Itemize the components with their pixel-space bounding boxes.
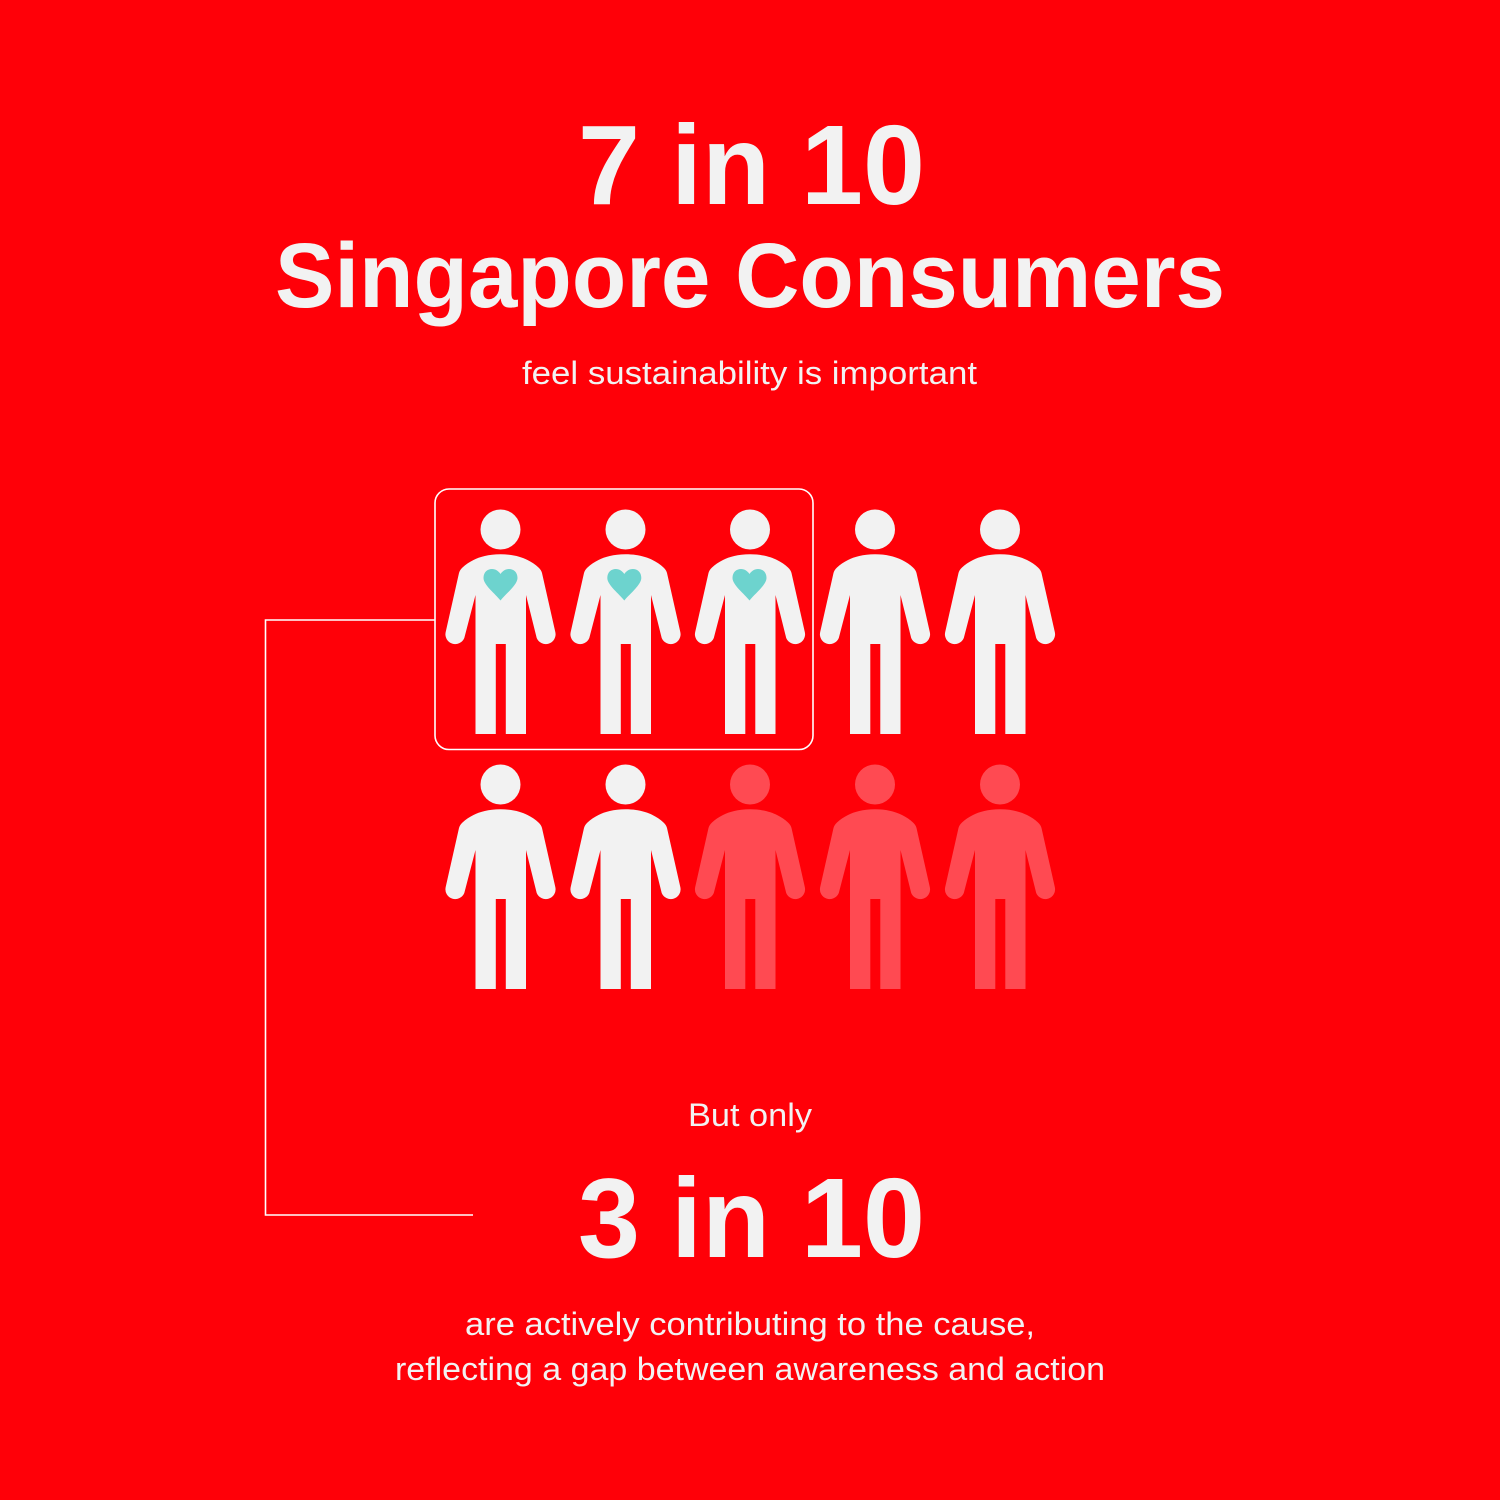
closing text (395, 1306, 1105, 1387)
text: But only: But only (688, 1097, 812, 1133)
people pictogram: 10 figures (445, 510, 1055, 989)
row 1 solid figures (445, 510, 1055, 734)
row 2 faded figures (695, 764, 1055, 989)
connector line from box to 3 in 10 (266, 620, 473, 1215)
hearts on three figures (484, 569, 766, 600)
title: 7 in 10: 7 in 10 (578, 102, 925, 228)
highlight box around three figures (435, 489, 813, 750)
subheading: feel sustainability is important (522, 355, 977, 391)
closing text: are actively contributing to the cause, (465, 1306, 1035, 1342)
closing text: reflecting a gap between awareness and action (395, 1351, 1105, 1387)
row 2 solid figures (445, 764, 681, 989)
statistic: 3 in 10: 3 in 10 (578, 1155, 925, 1281)
heading: Singapore Consumers: Singapore Consumers (275, 225, 1225, 327)
